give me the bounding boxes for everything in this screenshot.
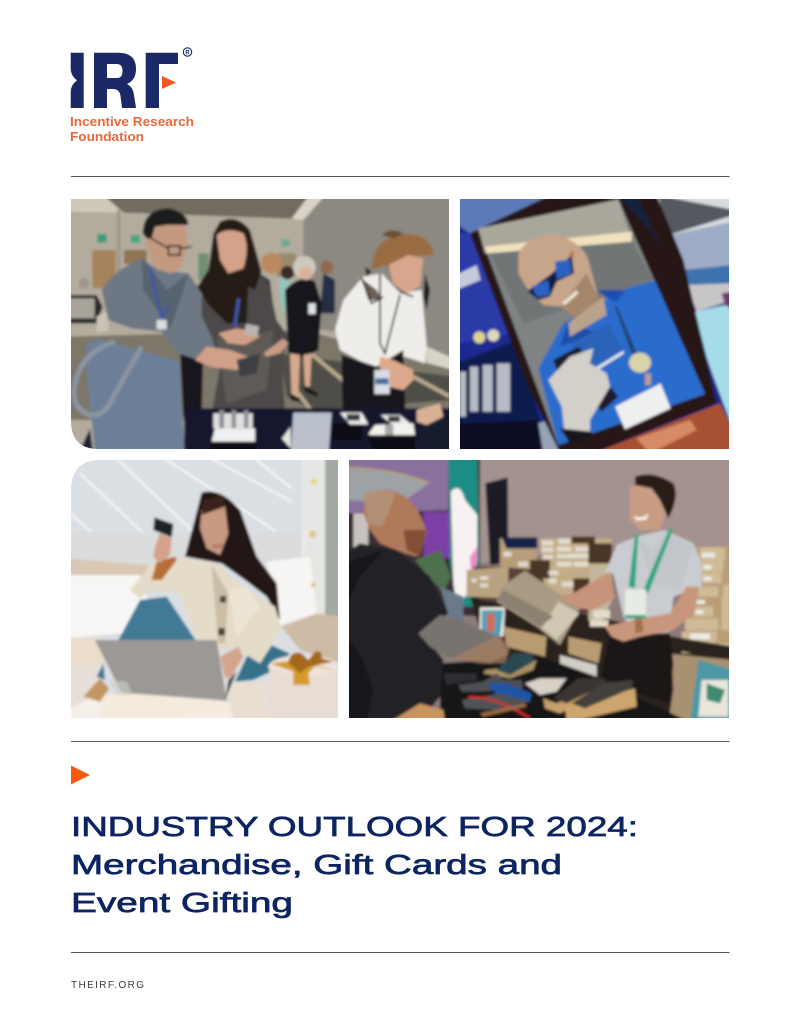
bottom divider bbox=[71, 952, 730, 953]
logo wordmark: Incentive Research bbox=[70, 115, 194, 129]
title: INDUSTRY OUTLOOK FOR 2024: bbox=[71, 811, 638, 842]
logo letter F bbox=[146, 53, 178, 108]
logo wordmark bbox=[70, 115, 194, 144]
photo: attendees examining watches at a table bbox=[67, 195, 454, 454]
logo letter I bbox=[71, 53, 84, 108]
photo: woman on bed holding a credit card with laptop and gift box bbox=[66, 455, 343, 722]
title bbox=[71, 811, 638, 918]
registered mark: R bbox=[185, 50, 190, 56]
top divider bbox=[71, 176, 730, 177]
photo: exhibitor handing a bag to a customer at a sandal booth bbox=[345, 455, 733, 722]
logo wordmark: Foundation bbox=[70, 130, 144, 144]
icon: orange play triangle bbox=[71, 766, 90, 784]
title: Merchandise, Gift Cards and bbox=[71, 849, 562, 880]
logo letter R bbox=[94, 53, 136, 108]
title: Event Gifting bbox=[71, 887, 293, 918]
photo: man with sunglasses seen through a framed mirror bbox=[456, 195, 733, 453]
logo orange triangle bbox=[162, 76, 176, 89]
footer website: THEIRF.ORG bbox=[71, 980, 144, 991]
middle divider bbox=[71, 741, 730, 742]
logo: Incentive Research Foundation bbox=[70, 48, 194, 144]
